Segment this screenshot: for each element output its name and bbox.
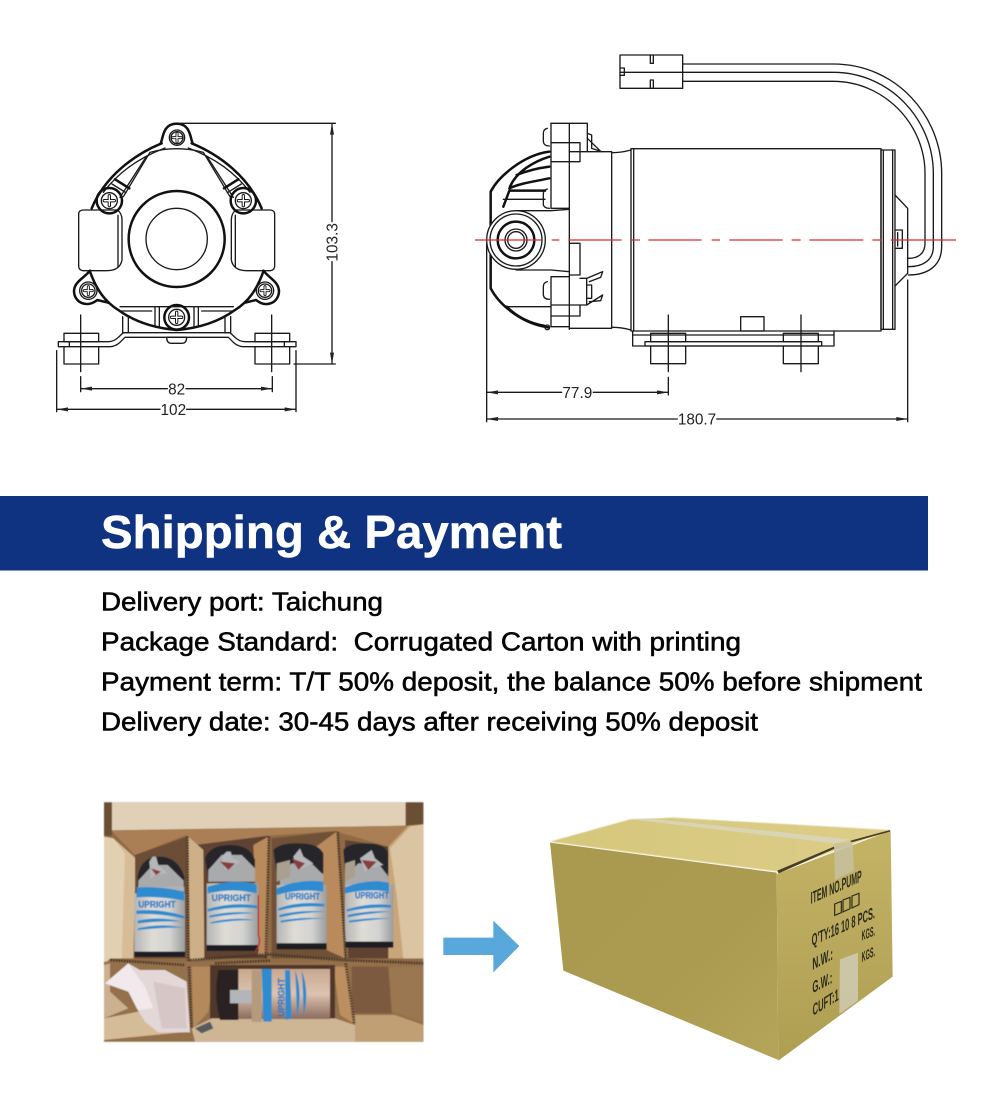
dimension 77.9: 77.9 <box>562 385 592 402</box>
photo: sealed printed carton: KGS. <box>862 924 875 945</box>
dimension 82: 82 <box>168 381 185 398</box>
dimension 102 <box>57 351 296 419</box>
drawing: pump side view with dimensions <box>475 55 956 429</box>
photo: sealed printed carton <box>550 818 893 1061</box>
motor body <box>612 149 908 331</box>
banner heading: Shipping & Payment <box>101 506 562 558</box>
pump 1: UPRIGHT <box>138 899 176 909</box>
mounting bracket and feet <box>633 315 834 372</box>
side ports <box>79 210 275 271</box>
arrow <box>443 921 519 972</box>
delivery date: Delivery date: 30-45 days after receiving 50% deposit <box>101 706 759 736</box>
carton right face <box>777 831 893 1061</box>
pump 3 <box>273 843 327 949</box>
pump lying horizontally <box>216 969 330 1022</box>
delivery port: Delivery port: Taichung <box>101 586 383 616</box>
mounting bracket and feet <box>58 315 296 372</box>
dimension 180.7 <box>487 243 908 429</box>
carton print: CUFT:1 <box>813 985 839 1020</box>
drawing: pump front view with dimensions <box>57 123 341 419</box>
carton print <box>811 866 875 1020</box>
pump 4: UPRIGHT <box>355 890 389 900</box>
text block: shipping terms <box>101 586 923 736</box>
photo: sealed printed carton: Q'TY:16 10 8 PCS. <box>812 903 875 950</box>
pump 2: UPRIGHT <box>212 893 251 903</box>
banner: Shipping & Payment <box>0 496 928 570</box>
pump 3: UPRIGHT <box>285 891 320 901</box>
pump lying horizontally: UPRIGHT <box>276 978 286 1017</box>
lower compartments <box>104 962 423 1042</box>
carton top face <box>550 818 890 872</box>
flap seam <box>777 830 890 873</box>
package standard: Package Standard: Corrugated Carton with printing <box>101 626 741 656</box>
dimension 77.9 <box>487 377 668 402</box>
packing tape <box>630 819 858 1014</box>
photo: pumps packed in carton <box>104 802 423 1042</box>
centre motor circles <box>129 191 225 287</box>
carton print: G.W.: <box>812 968 832 997</box>
carton print: ITEM NO.PUMP <box>811 866 862 908</box>
red centre line <box>475 238 956 242</box>
corrugated divider edges <box>111 832 423 1028</box>
pump head <box>491 123 612 330</box>
inlet port <box>487 209 569 272</box>
screws <box>74 124 279 330</box>
payment term: Payment term: T/T 50% deposit, the balance 50% before shipment <box>101 666 923 696</box>
carton left face <box>550 843 778 1060</box>
photo: sealed printed carton: KGS. <box>862 944 875 966</box>
carton interior <box>104 802 423 1042</box>
dimension 103.3: 103.3 <box>324 223 341 262</box>
connector and cable <box>620 55 942 275</box>
bubble wrap <box>105 963 190 1032</box>
dimension 82 <box>81 377 272 398</box>
pump 1 <box>134 857 185 957</box>
dimension 180.7: 180.7 <box>678 412 716 429</box>
pump housing outline <box>90 143 263 330</box>
carton print: N.W.: <box>812 944 833 974</box>
pump 2 <box>205 845 259 952</box>
dimension 102: 102 <box>161 402 186 419</box>
dimension 103.3 <box>180 123 341 364</box>
pump 4 <box>343 843 393 948</box>
